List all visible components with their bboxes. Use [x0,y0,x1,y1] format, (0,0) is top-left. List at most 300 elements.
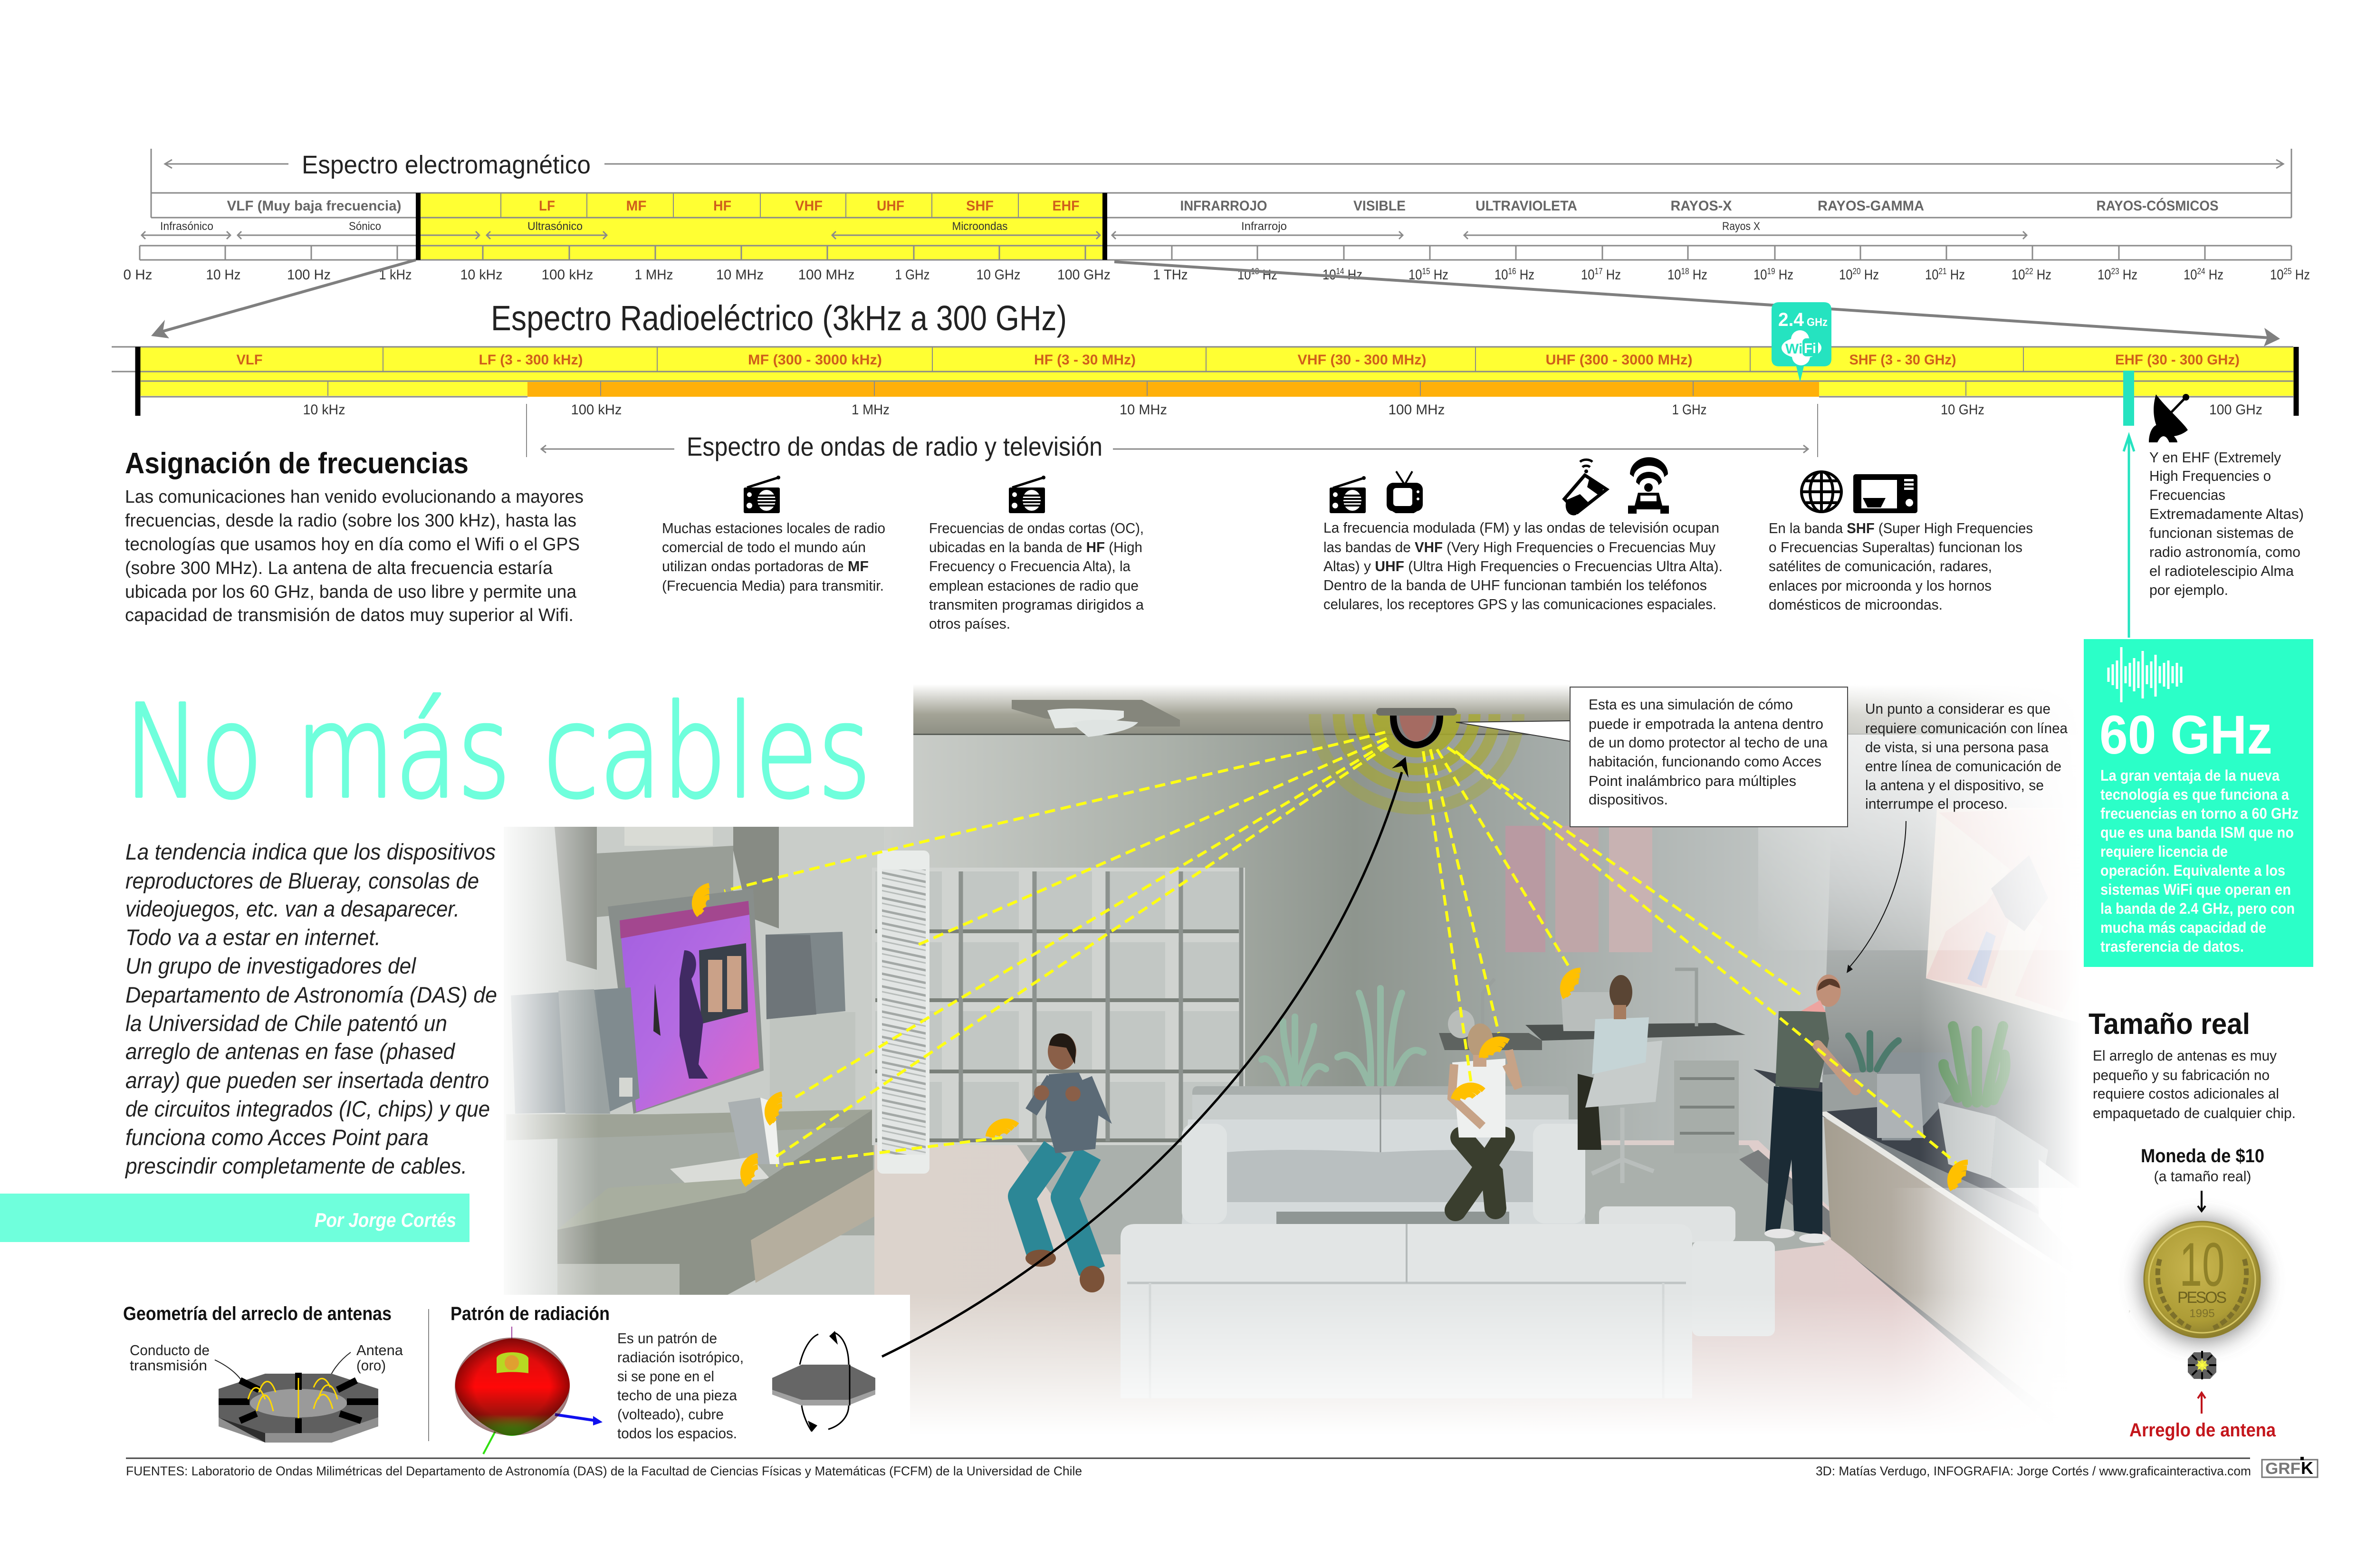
text block: introduction: Todo va a estar en internet. [125,925,381,950]
frequency scale labels: Hz [1344,267,1362,283]
note: line of sight: Un punto a considerar es que [1865,700,2050,717]
icon: 10 peso coin: 1995 [2189,1307,2215,1320]
frequency scale labels: Hz [1689,267,1707,283]
panel: Tamaño real: requiere costos adicionales al [2093,1085,2279,1102]
text block: HF: otros países. [929,615,1010,632]
frequency scale labels: 10 GHz [976,267,1021,283]
frequency scale labels: 1 MHz [635,267,673,283]
text: pattern description: si se pone en el [617,1368,714,1385]
text block: introduction: de circuitos integrados (IC, chips) y que [125,1096,490,1121]
panel: radio spectrum bar [112,347,2296,418]
note: line of sight: de vista, si una persona pasa [1865,739,2049,755]
title: No más cables: No más cables [124,677,871,827]
text block: SHF: satélites de comunicación, radares, [1769,558,1992,574]
frequency scale labels: 14 [1336,267,1344,276]
desk [1439,969,1745,1153]
text block: EHF: funcionan sistemas de [2149,525,2294,541]
text block: Asignación de frecuencias: capacidad de transmisión de datos muy superior al Wifi. [125,605,574,625]
sub-range labels: Sónico [349,220,381,233]
orange radio and television range [527,382,1819,397]
text block: introduction: Departamento de Astronomía (DAS) de [125,982,497,1007]
frequency scale labels: 13 [1251,267,1259,276]
shelf [506,1109,874,1140]
icon: microwave oven [1853,474,1917,513]
black limit bars [418,193,1105,260]
icon: globe satellite [1801,472,1841,512]
signal lines [724,732,1956,1166]
logo: GRFK: K [2301,1458,2313,1478]
footer: 3D: Matías Verdugo, INFOGRAFIA: Jorge Cortés / www.graficainteractiva.com [1816,1464,2251,1478]
text block: HF [929,520,1144,632]
frequency scale labels: Hz [2033,267,2051,283]
icon: sound wave [2108,647,2181,702]
panel: antenna array geometry: transmisión [130,1357,207,1374]
text block: FM VHF UHF: La frecuencia modulada (FM) y las ondas de televisión ocupan [1323,519,1719,536]
text block: SHF: domésticos de microondas. [1769,596,1943,613]
label: coin [2141,1146,2264,1185]
band names: VISIBLE [1353,198,1406,214]
tv wall column [770,1012,855,1128]
top brackets and arrows [140,149,2291,260]
fade: bottom [499,1292,2115,1435]
frequency scale labels: 10 Hz [206,267,240,283]
band names: INFRARROJO [1180,198,1267,214]
text block: introduction: arreglo de antenas en fase (phased [125,1039,456,1064]
text block: FM VHF UHF: Dentro de la banda de UHF funcionan también los teléfonos [1323,577,1707,593]
frequency scale labels: 20 [1852,267,1861,276]
frequency scale labels: Hz [2119,267,2137,283]
panel: electromagnetic spectrum [124,149,2310,283]
frequency scale labels: 10 [1925,267,1941,283]
frequency scale labels: 16 [1508,267,1516,276]
text block: introduction: Un grupo de investigadores del [125,953,416,978]
callout: dome simulation: Esta es una simulación de cómo [1589,696,1793,713]
icon: car with wifi [1628,457,1669,514]
heading: Espectro electromagnético: Espectro electromagnético [302,151,591,179]
frequency scale labels: 1 GHz [895,267,929,283]
illustration: living room scene [494,684,2129,1463]
callout: dome simulation [1456,687,1848,827]
text block: Asignación de frecuencias [125,447,584,625]
icon: antenna array [219,1373,378,1443]
marker: 2.4 GHz wifi pin: 2.4 [1778,309,1804,330]
panel behind tv [597,846,733,917]
band names: MF [626,198,646,214]
frequency scale labels [124,267,2310,283]
band labels: VLF [237,352,262,368]
text block: introduction: prescindir completamente de cables. [125,1153,467,1178]
coffee table [1276,1212,1509,1231]
yellow radio band highlight [418,193,1105,260]
text: pattern description: radiación isotrópico, [617,1349,744,1366]
frequency scale labels: 22 [2025,267,2033,276]
text block: SHF: En la banda SHF (Super High Frequencies [1769,520,2033,536]
text block: EHF: radio astronomía, como [2149,544,2300,560]
frequency scale labels: 1 kHz [379,267,412,283]
scale labels: 100 GHz [2209,402,2262,418]
counter face [1824,1117,2129,1441]
scale labels: 100 MHz [1389,402,1445,418]
text: pattern description: (volteado), cubre [617,1406,724,1423]
band labels: HF (3 - 30 MHz) [1034,352,1136,368]
text: pattern description: techo de una pieza [617,1387,738,1404]
arrow: to person [1847,821,1906,973]
band names: VLF (Muy baja frecuencia) [227,198,401,214]
chart: radiation lobe [455,1327,603,1454]
band names: UHF [877,198,904,214]
wall under tv [557,1114,874,1235]
band labels: LF (3 - 300 kHz) [479,352,583,368]
text block: EHF: el radiotelescipio Alma [2149,563,2294,579]
floor [874,1140,2091,1454]
left speaker [511,987,640,1114]
band labels: EHF (30 - 300 GHz) [2115,352,2240,368]
band names [227,198,2218,214]
left wall [504,732,884,1302]
frequency scale labels: 100 kHz [542,267,593,283]
text: advantage: La gran ventaja de la nueva [2100,767,2280,784]
text block: introduction: array) que pueden ser insertada dentro [125,1068,489,1093]
text block: MF [662,520,885,594]
icon: wifi cloud [1782,330,1821,365]
frequency scale labels: 10 [1322,267,1338,283]
sub-range labels: Infrarrojo [1241,220,1287,233]
person: man right [1764,975,1856,1243]
frequency scale labels: 23 [2111,267,2119,276]
scale labels: 10 MHz [1120,402,1167,418]
icon: 10 peso coin: PESOS [2177,1289,2227,1307]
text block: EHF: Extremadamente Altas) [2149,506,2304,522]
icons: wifi signal receivers [691,886,1968,1190]
band names: HF [713,198,731,214]
text block: FM VHF UHF: las bandas de VHF (Very High Frequencies o Frecuencias Muy [1323,539,1715,555]
floor dark baseboard [1739,1150,2100,1444]
frequency scale labels: 10 [1667,267,1683,283]
callout: dome simulation: puede ir empotrada la antena dentro [1589,716,1823,732]
panel: 60 GHz [2084,639,2313,967]
fade: right [1920,684,2081,1463]
front sofa [1121,1224,1692,1398]
band names: RAYOS-X [1671,198,1732,214]
scale labels: 10 GHz [1941,402,1984,418]
note: line of sight: la antena y el dispositivo, se [1865,777,2044,794]
text block: MF: comercial de todo el mundo aún [662,539,866,555]
band labels: SHF (3 - 30 GHz) [1849,352,1956,368]
frequency scale labels: 10 [1408,267,1424,283]
scale labels: 1 MHz [852,402,890,418]
shadow floor behind sofa [1017,1145,1825,1254]
text block: FM VHF UHF: celulares, los receptores GPS y las comunicaciones espaciales. [1323,596,1716,612]
frequency scale labels: 10 kHz [460,267,503,283]
text block: Asignación de frecuencias: tecnologías que usamos hoy en día como el Wifi o el GPS [125,535,580,555]
text block: introduction: funciona como Acces Point para [125,1125,429,1150]
icon: radio MF [744,476,780,513]
text block: EHF: por ejemplo. [2149,582,2228,598]
text: advantage: mucha más capacidad de [2100,919,2266,936]
person: woman on sofa [1452,1023,1518,1210]
frequency scale labels: 10 [1753,267,1769,283]
frequency scale labels: 15 [1422,267,1430,276]
panel: antenna array geometry: Antena [356,1342,403,1358]
ceiling lamp [1012,700,1180,737]
text block: EHF [2149,449,2304,598]
frequency scale labels: Hz [1861,267,1879,283]
panel: Tamaño real [2089,1008,2296,1441]
icon: 10 peso coin [2144,1222,2260,1338]
callout: dome simulation: de un domo protector al techo de una [1589,734,1828,751]
icon: flipped antenna [772,1331,875,1432]
band names: LF [539,198,555,214]
right wall painting [1926,808,2091,1026]
decorative column [877,851,929,1174]
marker: 2.4 GHz wifi pin: GHz [1807,316,1828,329]
antenna dome with signal rings [1315,708,1518,808]
frequency scale labels: 21 [1938,267,1947,276]
frequency scale labels: 10 [1495,267,1510,283]
wall paintings [1505,826,1652,952]
arrow: up to array [2198,1393,2205,1414]
text: pattern description [617,1330,744,1442]
text block: HF: Frecuencias de ondas cortas (OC), [929,520,1144,536]
person: seated woman with chair [1578,975,1662,1183]
plants behind sofa [1262,988,1423,1084]
text block: Asignación de frecuencias: Las comunicaciones han venido evolucionando a mayores [125,487,584,507]
arrow: zoom to radio spectrum (right) [1114,262,2280,346]
byline bar: Por Jorge Cortés [315,1209,456,1231]
panel: antenna array geometry: Conducto de [130,1342,210,1358]
counter top [1753,1069,2043,1216]
frequency scale labels: 10 [2098,267,2113,283]
frequency scale labels: Hz [1516,267,1534,283]
text block: HF: Frecuency o Frecuencia Alta), la [929,558,1131,574]
text block: SHF [1769,520,2033,613]
frequency scale labels: 24 [2197,267,2205,276]
sub-range labels: Infrasónico [160,220,213,233]
fade: top right [1758,684,2091,950]
text: advantage: trasferencia de datos. [2100,938,2244,955]
heading: Espectro de ondas de radio y televisión [527,404,1818,461]
text: advantage: sistemas WiFi que operan en [2100,881,2291,898]
frequency scale labels: 100 MHz [798,267,854,283]
text: advantage: que es una banda ISM que no [2100,824,2294,841]
text: advantage [2100,767,2299,955]
arrow: zoom to radio spectrum (left) [151,260,416,338]
label: coin: (a tamaño real) [2154,1168,2251,1185]
band labels [237,352,2240,368]
panel: antenna array geometry: Geometría del arreclo de antenas [123,1303,392,1324]
ottoman [1599,1206,1775,1336]
panel: antenna array geometry [123,1303,403,1443]
panel: radiation pattern [450,1303,875,1454]
text: pattern description: Es un patrón de [617,1330,717,1347]
sub-range labels: Ultrasónico [527,220,583,233]
text block: EHF: Frecuencias [2149,487,2225,503]
arrow: from antenna diagram to dome [882,757,1408,1357]
icon: 10 peso coin: 10 [2179,1230,2225,1299]
frequency scale labels: 25 [2283,267,2292,276]
text block: Asignación de frecuencias: (sobre 300 MHz). La antena de alta frecuencia estaría [125,558,553,578]
tv cabinet [557,1109,874,1295]
band names: VHF [795,198,823,214]
marker: 60 GHz position and arrow [2123,371,2134,638]
icon: antenna array real size [2188,1351,2216,1379]
footer: FUENTES: Laboratorio de Ondas Milimétricas del Departamento de Astronomía (DAS) de la Facultad de Ciencias Físicas y Matemáticas (FCFM) de la Universidad de Chile [126,1464,1082,1478]
sub-range labels: Microondas [952,220,1007,233]
bookshelf [872,868,1245,1145]
text block: FM VHF UHF [1323,519,1723,612]
scale labels: 10 kHz [303,402,345,418]
frequency scale labels: 18 [1681,267,1689,276]
panel: Tamaño real: El arreglo de antenas es muy [2093,1047,2277,1064]
text block: MF: Muchas estaciones locales de radio [662,520,885,536]
frequency scale labels: Hz [1259,267,1277,283]
game console [670,1098,779,1187]
sub-range labels: Rayos X [1722,220,1760,233]
scale labels: 1 GHz [1672,402,1707,418]
frequency scale labels: 10 [1839,267,1855,283]
icon: radio HF [1009,476,1045,513]
label: antenna array: Arreglo de antena [2129,1420,2276,1441]
text block: Asignación de frecuencias: ubicada por los 60 GHz, banda de uso libre y permite una [125,582,577,602]
sub-range labels [160,220,1760,233]
frequency scale labels: 10 [2270,267,2286,283]
logo: GRFK [2262,1457,2318,1478]
heading: 60 GHz: 60 GHz [2099,705,2272,765]
note: line of sight [1847,700,2068,973]
scale labels: 100 kHz [571,402,622,418]
upper wall unit [555,827,779,970]
frequency scale labels: 19 [1767,267,1775,276]
person: man left [1022,1033,1104,1292]
text block: SHF: o Frecuencias Superaltas) funcionan los [1769,539,2022,555]
black limit bars [138,347,2296,416]
text: advantage: tecnología es que funciona a [2100,786,2289,803]
text block: introduction: videojuegos, etc. van a desaparecer. [125,896,460,921]
coin shadow [2141,1220,2263,1342]
band names: ULTRAVIOLETA [1475,198,1577,214]
callout: dome simulation: Point inalámbrico para múltiples [1589,773,1796,789]
text block: SHF: enlaces por microonda y los hornos [1769,577,1992,594]
frequency scale labels: Hz [2292,267,2310,283]
heading: Espectro Radioeléctrico: Espectro Radioeléctrico (3kHz a 300 GHz) [491,298,1067,338]
frequency scale labels: Hz [1775,267,1793,283]
counter equipment [1822,1052,2091,1273]
icon: wifi cloud: Wi [1785,341,1802,357]
divider [428,1309,429,1441]
panel: antenna array geometry: (oro) [356,1357,386,1374]
frequency scale labels: 100 GHz [1057,267,1111,283]
callout: dome simulation: dispositivos. [1589,791,1668,808]
scale labels [303,402,2262,418]
band names: RAYOS-CÓSMICOS [2097,198,2218,214]
wall [504,684,2091,1207]
right wall [1822,735,2091,1311]
note: line of sight: requiere comunicación con línea [1865,720,2068,736]
tv frame [608,889,764,1114]
text block: introduction [125,839,497,1178]
frequency scale labels: 1 THz [1153,267,1188,283]
text block: FM VHF UHF: Altas) y UHF (Ultra High Frequencies o Frecuencias Ultra Alta). [1323,558,1723,574]
icon: wifi cloud: Fi [1804,341,1816,356]
arrow: down to coin [2198,1191,2205,1211]
icon: hand with phone [1564,459,1607,516]
icon: television [1387,471,1423,513]
icon: radio telescope dish [2149,394,2189,442]
band labels: MF (300 - 3000 kHz) [748,352,882,368]
text block: MF: utilizan ondas portadoras de MF [662,558,869,574]
frequency scale labels: Hz [1947,267,1965,283]
panel: Tamaño real: Tamaño real [2089,1008,2250,1041]
label: coin: Moneda de $10 [2141,1146,2264,1166]
icon: radio FM [1330,476,1366,513]
text block: HF: ubicadas en la banda de HF (High [929,539,1142,555]
panel: antenna diagrams background [0,1295,910,1458]
frequency scale labels: 10 [1581,267,1597,283]
byline bar [0,1194,469,1242]
text block: EHF: Y en EHF (Extremely [2149,449,2281,466]
text block: introduction: la Universidad de Chile patentó un [125,1011,447,1036]
frequency scale labels: 10 [2012,267,2027,283]
yellow bar [138,347,2296,396]
frequency scale labels: Hz [1603,267,1621,283]
frequency scale labels: 10 [2184,267,2199,283]
text block: HF: emplean estaciones de radio que [929,577,1139,594]
frequency scale labels: Hz [1430,267,1448,283]
footer [126,1457,2318,1478]
note: line of sight: entre línea de comunicación de [1865,758,2061,774]
band labels: VHF (30 - 300 MHz) [1297,352,1427,368]
panel: radiation pattern: Patrón de radiación [450,1303,610,1324]
band names: EHF [1052,198,1080,214]
frequency scale labels: 0 Hz [124,267,152,283]
frequency scale labels: Hz [2205,267,2223,283]
fade: left [494,822,599,1297]
frequency scale labels: 10 MHz [716,267,764,283]
panel: Tamaño real: pequeño y su fabricación no [2093,1067,2270,1083]
panel: Tamaño real: empaquetado de cualquier chip. [2093,1105,2296,1121]
rear sofa [1182,1086,1585,1224]
text: advantage: operación. Equivalente a los [2100,862,2285,879]
text: advantage: frecuencias en torno a 60 GHz [2100,805,2299,822]
frequency scale labels: 17 [1594,267,1603,276]
right speaker [766,932,845,1019]
panel: main title background [0,684,913,827]
text block: Asignación de frecuencias: frecuencias, desde la radio (sobre los 300 kHz), hasta las [125,511,576,531]
marker: 2.4 GHz wifi pin [1772,302,1831,382]
text: advantage: la banda de 2.4 GHz, pero con [2100,900,2295,917]
text block: EHF: High Frequencies o [2149,468,2271,484]
frequency scale labels: 10 [1237,267,1253,283]
text block: introduction: reproductores de Blueray, consolas de [125,868,479,893]
text block: Asignación de frecuencias: Asignación de frecuencias [125,447,469,480]
text block: introduction: La tendencia indica que los dispositivos [125,839,496,864]
text: pattern description: todos los espacios. [617,1425,737,1442]
plants on counter [1849,1026,2005,1102]
note: line of sight: interrumpe el proceso. [1865,795,2008,812]
band labels: UHF (300 - 3000 MHz) [1545,352,1693,368]
ceiling [504,684,2091,735]
text block: HF: transmiten programas dirigidos a [929,596,1144,613]
fade: lower right [1891,1188,2081,1463]
text: advantage: requiere licencia de [2100,843,2228,860]
tv screen [620,901,759,1112]
band names: RAYOS-GAMMA [1818,198,1924,214]
text block: MF: (Frecuencia Media) para transmitir. [662,577,884,594]
logo: GRFK: GRF [2265,1460,2300,1478]
heading: Espectro de ondas de radio y televisión: Espectro de ondas de radio y televisión [687,431,1102,461]
frequency scale labels: 100 Hz [287,267,331,283]
band names: SHF [966,198,994,214]
